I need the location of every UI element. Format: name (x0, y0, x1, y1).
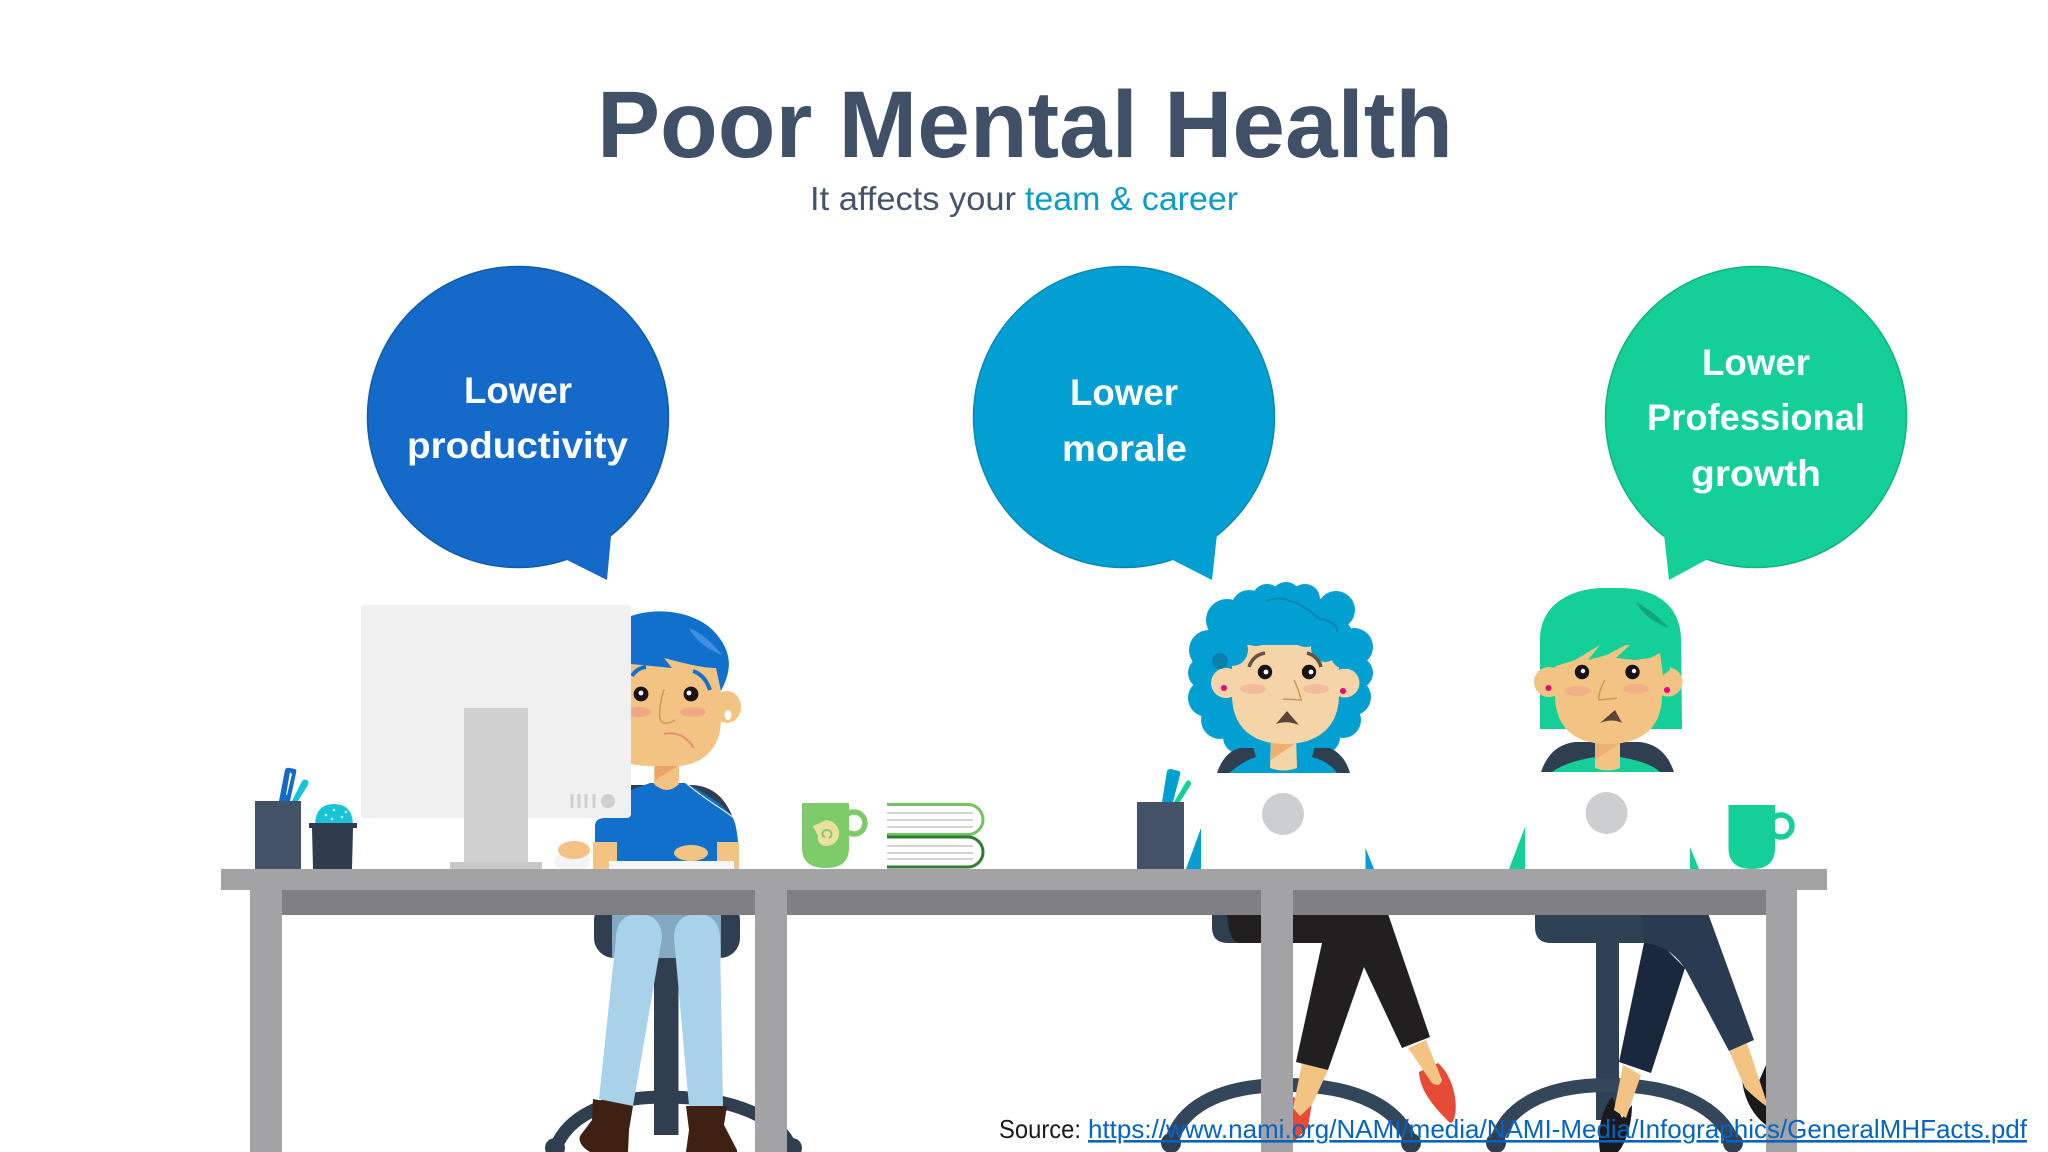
head: man (625, 611, 741, 766)
subtitle (810, 180, 1238, 217)
green mug with snail (802, 803, 865, 868)
neck: man (654, 760, 679, 790)
speech bubble: lower productivity: productivity (407, 425, 628, 466)
laptop: woman one (1186, 793, 1374, 869)
man at desktop computer (361, 605, 802, 1152)
speech bubble: lower professional growth: Lower (1702, 342, 1810, 383)
monitor back (361, 605, 631, 869)
legs: woman one (1227, 905, 1456, 1143)
chair: woman one (1161, 905, 1421, 1152)
hair: woman two (1540, 588, 1682, 729)
desk (221, 869, 1827, 1152)
chair: man (545, 785, 802, 1152)
speech bubble: lower productivity: Lower (464, 370, 572, 411)
laptop: woman two (1509, 792, 1699, 869)
speech bubble: lower professional growth (1606, 266, 1906, 580)
speech bubble: lower morale (974, 266, 1274, 580)
subtitle: team & career (1025, 180, 1238, 217)
face: woman one (1211, 598, 1360, 744)
speech bubble: lower professional growth: growth (1691, 453, 1821, 494)
pencil cup: left (255, 768, 308, 869)
shirt: man (595, 783, 739, 869)
speech bubble: lower morale: morale (1062, 428, 1187, 469)
speech bubble: lower professional growth: Professional (1647, 397, 1865, 438)
legs: woman two (1599, 905, 1766, 1152)
hair: woman one (1188, 582, 1373, 754)
stack of books (887, 804, 983, 867)
chair: woman two (1486, 905, 1743, 1152)
keyboard (609, 861, 734, 870)
arms: man (593, 842, 739, 869)
mouse and hand (554, 841, 590, 869)
trousers: man (599, 905, 723, 1106)
green mug: right (1728, 805, 1792, 869)
title: Poor Mental Health (597, 72, 1453, 178)
woman with blue hair (1161, 582, 1456, 1152)
source citation: Source: (999, 1114, 1081, 1144)
woman with green hair (1486, 588, 1766, 1152)
torso: woman two (1541, 735, 1674, 772)
pencil cup: centre (1137, 769, 1191, 869)
boots: man (580, 1099, 737, 1152)
face: woman two (1534, 602, 1682, 744)
torso: woman one (1217, 735, 1350, 773)
speech bubble: lower productivity (368, 266, 668, 580)
cactus plant (309, 804, 357, 869)
source citation: https://www.nami.org/NAMI/media/NAMI-Media/Infographics/GeneralMHFacts.pdf (1088, 1114, 2028, 1144)
speech bubble: lower morale: Lower (1070, 372, 1178, 413)
subtitle: It affects your (810, 180, 1016, 217)
